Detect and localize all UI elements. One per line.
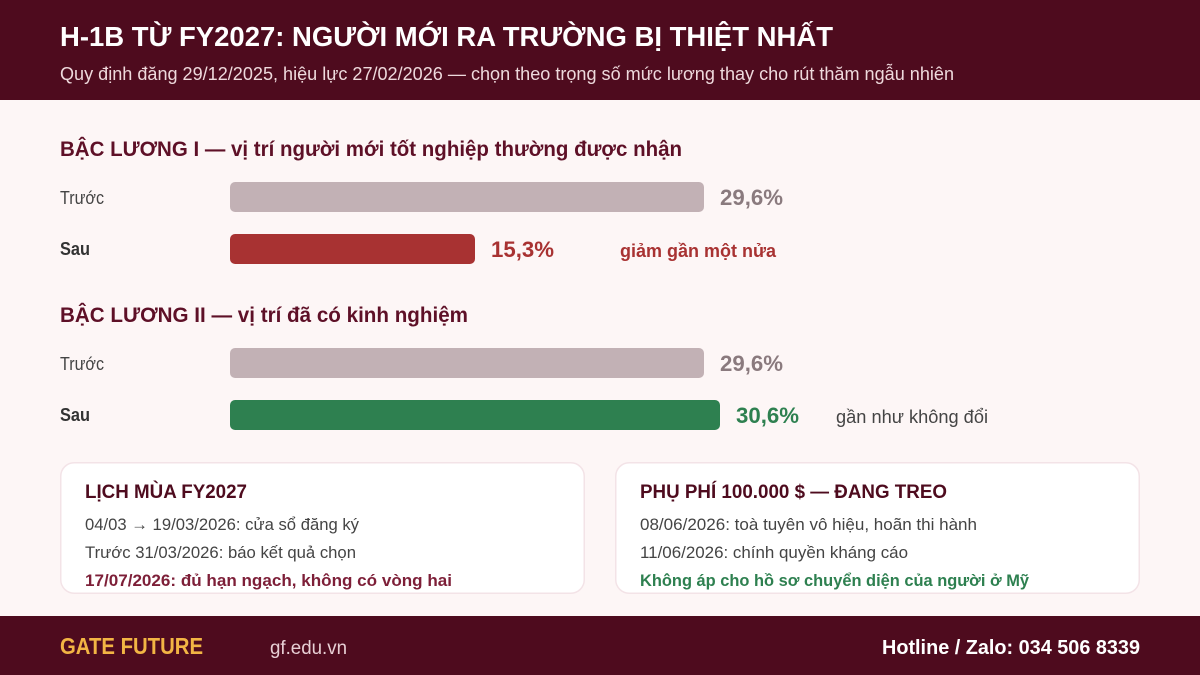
value: 29.6%: 29,6% — [720, 351, 783, 376]
heading: wage level II: BẬC LƯƠNG II — vị trí đã có kinh nghiệm — [60, 303, 468, 327]
panel: 100,000 USD fee — [616, 463, 1139, 593]
website: gf.edu.vn — [270, 638, 347, 659]
row label: after: Sau — [60, 239, 90, 259]
row label: after: Sau — [60, 405, 90, 425]
subtitle: Quy định đăng 29/12/2025, hiệu lực 27/02/2026 — chọn theo trọng số mức lương thay cho rút thăm ngẫu nhiên — [60, 63, 954, 84]
calendar line 2: Trước 31/03/2026: báo kết quả chọn — [85, 543, 356, 562]
panel: wage level II — [60, 303, 988, 430]
bar: before 29.6% — [230, 348, 704, 378]
header band — [0, 0, 1200, 100]
value: 30.6%: 30,6% — [736, 403, 799, 428]
bar: after 30.6% — [230, 400, 720, 430]
value: 15.3%: 15,3% — [491, 237, 554, 262]
card heading: LỊCH MÙA FY2027 — [85, 481, 247, 503]
bar: after 15.3% — [230, 234, 475, 264]
calendar line 3: 17/07/2026: đủ hạn ngạch, không có vòng hai — [85, 571, 452, 590]
panel: wage level I — [60, 137, 783, 264]
title: H-1B TỪ FY2027: NGƯỜI MỚI RA TRƯỜNG BỊ THIỆT NHẤT — [60, 21, 833, 52]
panel: FY2027 calendar — [61, 463, 584, 593]
calendar line 1: 04/03 → 19/03/2026: cửa sổ đăng ký — [85, 515, 359, 534]
fee line 3: Không áp cho hồ sơ chuyển diện của người ở Mỹ — [640, 571, 1030, 590]
note: nearly unchanged: gần như không đổi — [836, 407, 988, 427]
row label: before: Trước — [60, 354, 104, 374]
row label: before: Trước — [60, 188, 104, 208]
fee line 1: 08/06/2026: toà tuyên vô hiệu, hoãn thi hành — [640, 515, 977, 534]
fee line 2: 11/06/2026: chính quyền kháng cáo — [640, 543, 908, 562]
brand: GATE FUTURE — [60, 633, 203, 659]
footer band — [0, 616, 1200, 675]
card heading: PHỤ PHÍ 100.000 $ — ĐANG TREO — [640, 481, 947, 503]
heading: wage level I: BẬC LƯƠNG I — vị trí người mới tốt nghiệp thường được nhận — [60, 137, 682, 161]
value: 29.6%: 29,6% — [720, 185, 783, 210]
hotline: Hotline / Zalo: 034 506 8339 — [882, 637, 1140, 659]
note: nearly halved: giảm gần một nửa — [620, 241, 777, 261]
bar: before 29.6% — [230, 182, 704, 212]
